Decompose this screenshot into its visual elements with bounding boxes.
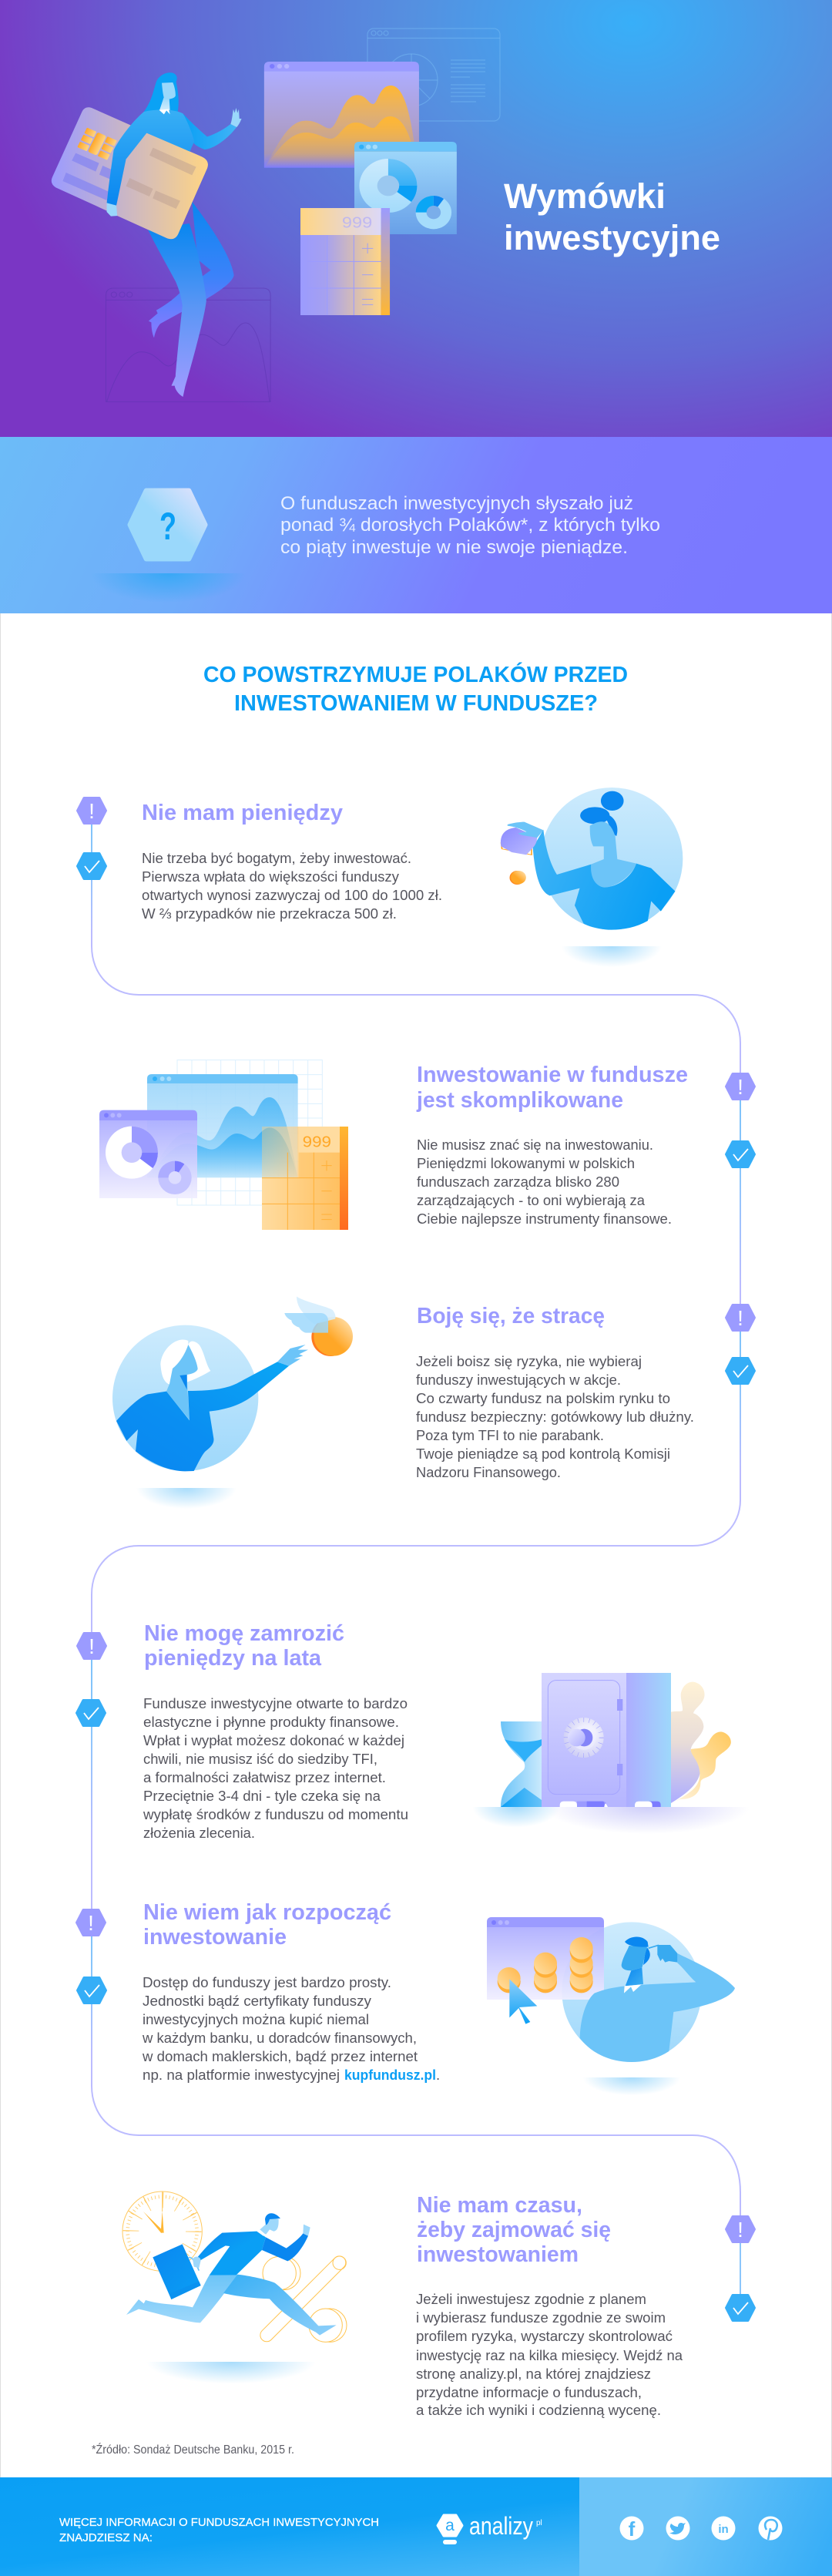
running man xyxy=(126,2213,337,2336)
item 5: heading: inwestowanie xyxy=(143,1925,287,1950)
grid background xyxy=(177,1060,322,1205)
section heading: CO POWSTRZYMUJE POLAKÓW PRZED xyxy=(203,661,628,687)
outline window: pie and text xyxy=(367,29,500,121)
item 4: body text: wypłatę środków z funduszu od momentu xyxy=(143,1806,408,1822)
calculator: 999 xyxy=(342,213,372,231)
item 4: body text xyxy=(143,1695,408,1841)
item 5: body text: . xyxy=(436,2067,440,2083)
icon: linkedin xyxy=(712,2517,735,2540)
item 6: timeline markers xyxy=(726,2216,755,2321)
social icons xyxy=(619,2517,783,2541)
item 1: body text: Nie trzeba być bogatym, żeby inwestować. xyxy=(142,850,411,866)
item 1: body text: W ⅔ przypadków nie przekracza 500 zł. xyxy=(142,905,397,922)
orange calculator xyxy=(262,1127,348,1230)
item 2: timeline markers: ! xyxy=(737,1075,743,1099)
ground shadow xyxy=(146,2362,316,2383)
item 2: illustration charts and calculator xyxy=(99,1060,348,1230)
icon: question hexagon: ? xyxy=(159,505,176,548)
plant blobs xyxy=(671,1682,731,1805)
item 3: ground shadow xyxy=(136,1488,237,1509)
item 5: body text: inwestycyjnych można kupić niemal xyxy=(143,2011,369,2027)
item 4: heading: pieniędzy na lata xyxy=(144,1646,322,1671)
intro strip xyxy=(0,437,832,613)
item 6: body text: stronę analizy.pl, na której znajdziesz xyxy=(416,2366,651,2382)
item 4: body text: złożenia zlecenia. xyxy=(143,1825,255,1841)
hero background xyxy=(0,0,832,437)
purple donut window xyxy=(99,1110,197,1198)
clock xyxy=(122,2191,202,2271)
item 6: body text: a także ich wyniki i codzienną wycenę. xyxy=(416,2402,661,2418)
item 1: body text: otwartych wynosi zazwyczaj od 100 do 1000 zł. xyxy=(142,887,442,903)
item 4: body text: elastyczne i płynne produkty finansowe. xyxy=(143,1714,399,1730)
item 1: heading: Nie mam pieniędzy xyxy=(142,801,343,825)
intro text: co piąty inwestuje w nie swoje pieniądze. xyxy=(280,537,628,558)
item 1: timeline markers: ! xyxy=(89,799,95,823)
item 5: body text: w domach maklerskich, bądź przez internet xyxy=(142,2048,418,2064)
item 4: timeline markers xyxy=(77,1634,106,1726)
item 6: body text: profilem ryzyka, wystarczy skontrolować xyxy=(416,2328,673,2344)
item 3: body text: Twoje pieniądze są pod kontrolą Komisji xyxy=(416,1446,670,1462)
intro text: O funduszach inwestycyjnych słyszało już xyxy=(280,493,633,514)
item 3: timeline markers xyxy=(726,1305,755,1384)
item 5: heading: Nie wiem jak rozpocząć xyxy=(143,1900,391,1925)
ground shadow xyxy=(583,2077,680,2095)
item 3: body text: Co czwarty fundusz na polskim rynku to xyxy=(416,1390,670,1406)
item 5: body text: w każdym banku, u doradców finansowych, xyxy=(142,2030,417,2046)
item 6: illustration running man, clock and percent xyxy=(122,2191,348,2383)
item 2: body text: Nie musisz znać się na inwestowaniu. xyxy=(417,1137,653,1153)
item 3: heading: Boję się, że stracę xyxy=(417,1304,605,1328)
icon: facebook xyxy=(619,2517,644,2541)
footer xyxy=(0,2477,832,2576)
section heading: INWESTOWANIEM W FUNDUSZE? xyxy=(234,691,598,716)
item 4: timeline markers: ! xyxy=(89,1634,95,1658)
section heading xyxy=(203,661,628,716)
item 1: ground shadow xyxy=(562,946,662,967)
man figure xyxy=(580,1936,735,2062)
calculator xyxy=(300,208,390,315)
item 6: body text: i wybierasz fundusze zgodnie ze swoim xyxy=(416,2309,666,2326)
title: inwestycyjne xyxy=(504,218,720,257)
logo: analizy.pl: pl xyxy=(536,2519,542,2527)
title: Wymówki xyxy=(504,176,666,216)
item 2: body text: Ciebie najlepsze instrumenty finansowe. xyxy=(417,1211,672,1227)
item 4: heading: Nie mogę zamrozić xyxy=(144,1621,344,1646)
source note: *Źródło: Sondaż Deutsche Banku, 2015 r. xyxy=(92,2443,294,2457)
item 5: illustration man choosing coins xyxy=(487,1917,735,2095)
hourglass xyxy=(501,1721,543,1807)
window: donut charts xyxy=(354,142,457,234)
intro text: ponad ¾ dorosłych Polaków*, z których tylko xyxy=(280,515,660,536)
item 4: body text: Fundusze inwestycyjne otwarte to bardzo xyxy=(143,1695,408,1711)
hero illustration: woman with card and charts xyxy=(52,62,457,401)
item 3: body text: Jeżeli boisz się ryzyka, nie wybieraj xyxy=(416,1353,642,1369)
item 2: heading xyxy=(416,1063,688,1113)
safe xyxy=(542,1673,671,1807)
item 3: illustration woman reaching for flying coin xyxy=(112,1297,353,1471)
item 1: body text xyxy=(142,850,442,922)
item 2: body text xyxy=(417,1137,672,1227)
item 3: timeline markers: ! xyxy=(737,1306,743,1330)
item 5: timeline markers: ! xyxy=(88,1911,94,1935)
icon: facebook: f xyxy=(629,2517,636,2541)
icon: cursor xyxy=(509,1979,537,2024)
orange calculator: 999 xyxy=(303,1133,331,1150)
item 5: body text: kupfundusz.pl xyxy=(344,2067,436,2083)
item 6: timeline markers: ! xyxy=(737,2218,743,2242)
item 1: timeline markers xyxy=(77,798,106,878)
item 4: body text: Przeciętnie 3-4 dni - tyle czeka się na xyxy=(143,1788,381,1804)
item 2: body text: zarządzających - to oni wybierają za xyxy=(417,1192,646,1208)
item 3: body text: Poza tym TFI to nie parabank. xyxy=(416,1427,604,1443)
item 4: illustration safe, hourglass and plant xyxy=(472,1673,750,1834)
outline window: line chart xyxy=(106,288,270,401)
intro text xyxy=(280,493,660,558)
item 6: heading xyxy=(417,2193,611,2267)
percent sign xyxy=(257,2253,348,2344)
item 6: body text: przydatne informacje o funduszach, xyxy=(416,2384,642,2400)
item 3: body text: fundusz bezpieczny: gotówkowy lub dłużny. xyxy=(416,1409,694,1425)
item 5: body text: Dostęp do funduszy jest bardzo prosty. xyxy=(143,1974,391,1990)
footer text: ZNAJDZIESZ NA: xyxy=(59,2531,153,2544)
icon: question hexagon xyxy=(130,491,205,559)
coins window xyxy=(487,1917,604,2000)
item 3: body text xyxy=(416,1353,694,1480)
icon: twitter xyxy=(666,2517,690,2540)
item 2: body text: Pieniędzmi lokowanymi w polskich xyxy=(417,1155,635,1171)
credit card front xyxy=(116,133,208,239)
item 5: body text: np. na platformie inwestycyjnej xyxy=(143,2067,340,2083)
footer text: WIĘCEJ INFORMACJI O FUNDUSZACH INWESTYCYJNYCH xyxy=(59,2516,379,2529)
item 5: body text xyxy=(142,1974,440,2083)
white content panel xyxy=(0,613,832,2477)
item 5: heading xyxy=(143,1900,391,1950)
icon: pinterest xyxy=(758,2517,783,2540)
item 6: heading: żeby zajmować się xyxy=(417,2218,611,2242)
credit card back xyxy=(52,107,208,239)
item 4: body text: a formalności załatwisz przez internet. xyxy=(143,1769,386,1785)
ground shadows xyxy=(545,1807,750,1834)
footer text xyxy=(59,2516,379,2544)
item 1: body text: Pierwsza wpłata do większości funduszy xyxy=(142,868,400,885)
item 1: illustration woman with empty wallet xyxy=(501,788,683,930)
logo: analizy.pl: a xyxy=(445,2517,455,2534)
window: orange area chart xyxy=(264,62,419,168)
item 6: heading: Nie mam czasu, xyxy=(417,2193,582,2218)
icon: linkedin: in xyxy=(718,2523,729,2536)
logo: analizy.pl xyxy=(438,2512,542,2544)
item 3: body text: Nadzoru Finansowego. xyxy=(416,1464,561,1480)
item 6: heading: inwestowaniem xyxy=(417,2242,579,2267)
timeline connector xyxy=(91,811,741,2308)
item 4: body text: chwili, nie musisz iść do siedziby TFI, xyxy=(143,1751,377,1767)
logo: analizy.pl: analizy xyxy=(469,2512,533,2540)
item 2: body text: funduszach zarządza blisko 280 xyxy=(417,1174,619,1190)
item 5: timeline markers xyxy=(77,1909,106,2003)
woman figure xyxy=(107,72,242,397)
item 3: body text: funduszy inwestujących w akcje. xyxy=(416,1372,621,1388)
item 4: body text: Wpłat i wypłat możesz dokonać w każdej xyxy=(143,1732,404,1748)
item 6: body text: inwestycję raz na kilka miesięcy. Wejdź na xyxy=(416,2347,683,2363)
item 6: body text: Jeżeli inwestujesz zgodnie z planem xyxy=(416,2291,646,2307)
item 2: timeline markers xyxy=(726,1074,755,1167)
item 4: heading xyxy=(144,1621,344,1671)
title xyxy=(504,176,720,257)
shadow under question hexagon xyxy=(90,573,247,603)
item 5: body text: Jednostki bądź certyfikaty funduszy xyxy=(143,1993,372,2009)
item 2: heading: Inwestowanie w fundusze xyxy=(417,1063,688,1087)
blue chart window xyxy=(147,1074,298,1177)
item 6: body text xyxy=(416,2291,683,2418)
item 2: heading: jest skomplikowane xyxy=(416,1088,623,1113)
